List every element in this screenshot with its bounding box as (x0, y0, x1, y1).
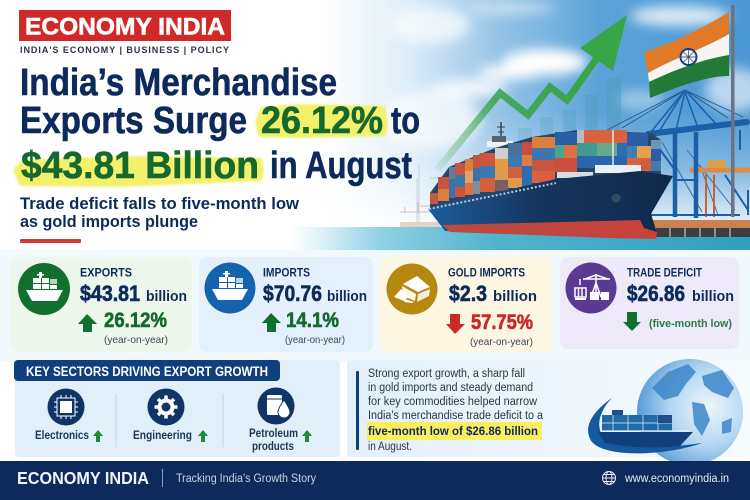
green growth arrow (437, 15, 627, 170)
panel: summary (347, 359, 750, 465)
card: imports: 14.1% (286, 309, 339, 332)
card: gold imports: (year-on-year) (470, 336, 533, 348)
hull (428, 171, 673, 238)
summary text (367, 368, 544, 453)
card: imports: (year-on-year) (285, 334, 345, 346)
card: trade deficit: billion (692, 288, 734, 305)
footer: ECONOMY INDIA (17, 468, 149, 488)
card: trade deficit: TRADE DEFICIT (627, 266, 703, 280)
panel: key sectors (14, 360, 340, 457)
icon: globe with ship (588, 359, 743, 465)
Indian flag (644, 12, 729, 98)
card: imports (199, 257, 373, 352)
card: gold imports: billion (493, 288, 537, 305)
yellow highlights (13, 104, 388, 187)
growth bars (518, 78, 621, 140)
card: imports: $70.76 (263, 281, 322, 306)
icon: gold bars (386, 264, 438, 314)
subtitle (20, 194, 300, 231)
footer (0, 461, 750, 500)
title: Exports Surge (20, 100, 247, 142)
summary text: five-month low of $26.86 billion (368, 424, 538, 438)
title: to (391, 100, 420, 142)
heading (14, 360, 280, 381)
card: gold imports: 57.75% (471, 311, 533, 334)
summary text: in August. (368, 441, 412, 453)
sector: petroleum products: products (252, 441, 294, 453)
summary text: Strong export growth, a sharp fall (368, 368, 525, 380)
card: trade deficit: (five-month low) (649, 318, 732, 330)
card: exports: billion (146, 288, 187, 305)
arrow down (446, 314, 465, 334)
hull red boot (442, 220, 657, 239)
subtitle: Trade deficit falls to five-month low (20, 194, 300, 213)
flag pole (731, 5, 734, 217)
card: exports: $43.81 (80, 281, 140, 306)
port crane (607, 90, 750, 218)
dock with containers (645, 220, 750, 237)
footer: www.economyindia.in (624, 473, 729, 485)
icon: cargo ship (204, 262, 256, 314)
logo badge: ECONOMY INDIA (25, 14, 225, 40)
summary text: India's merchandise trade deficit to a (368, 410, 544, 422)
tagline: INDIA'S ECONOMY | BUSINESS | POLICY (20, 45, 229, 55)
container ship (428, 122, 673, 239)
card: trade deficit (560, 257, 739, 349)
summary text: in gold imports and steady demand (368, 382, 533, 394)
title: 26.12% (261, 100, 383, 142)
card: exports: EXPORTS (80, 266, 132, 280)
heading: KEY SECTORS DRIVING EXPORT GROWTH (26, 364, 268, 379)
card: exports: 26.12% (104, 309, 167, 332)
ship (598, 410, 693, 447)
bridge and mast (487, 122, 513, 147)
summary text: for key commodities helped narrow (368, 396, 538, 408)
arrow up (78, 314, 97, 332)
band behind stat cards (0, 250, 750, 362)
hero background: sky and clouds (0, 0, 750, 250)
card: exports (11, 257, 192, 352)
red accent rule (20, 239, 81, 243)
icon: crane with containers (566, 262, 616, 314)
title: in August (270, 145, 412, 187)
sector: petroleum products (249, 388, 312, 453)
card: gold imports: $2.3 (449, 281, 487, 306)
subtitle: as gold imports plunge (20, 212, 198, 231)
containers (430, 130, 661, 208)
sector: petroleum products: Petroleum (249, 428, 298, 440)
sector: engineering (133, 388, 208, 442)
sector: engineering: Engineering (133, 430, 192, 442)
arrow up (262, 313, 281, 332)
arrow down (623, 312, 641, 331)
card: imports: IMPORTS (263, 266, 310, 280)
icon: cargo ship (18, 263, 70, 315)
card: imports: billion (327, 288, 367, 305)
title: India’s Merchandise (20, 62, 337, 104)
bow anchor (612, 194, 620, 202)
distant port skyline (400, 165, 455, 228)
water (290, 227, 750, 250)
sector: electronics: Electronics (35, 430, 89, 442)
card: trade deficit: $26.86 (627, 281, 685, 306)
icon: web globe (602, 472, 616, 484)
sector: electronics (35, 388, 103, 442)
card: gold imports (380, 257, 552, 352)
card: gold imports: GOLD IMPORTS (448, 266, 525, 280)
footer: Tracking India’s Growth Story (176, 473, 316, 485)
title (13, 62, 420, 187)
title: $43.81 Billion (21, 145, 259, 187)
card: exports: (year-on-year) (104, 334, 168, 346)
